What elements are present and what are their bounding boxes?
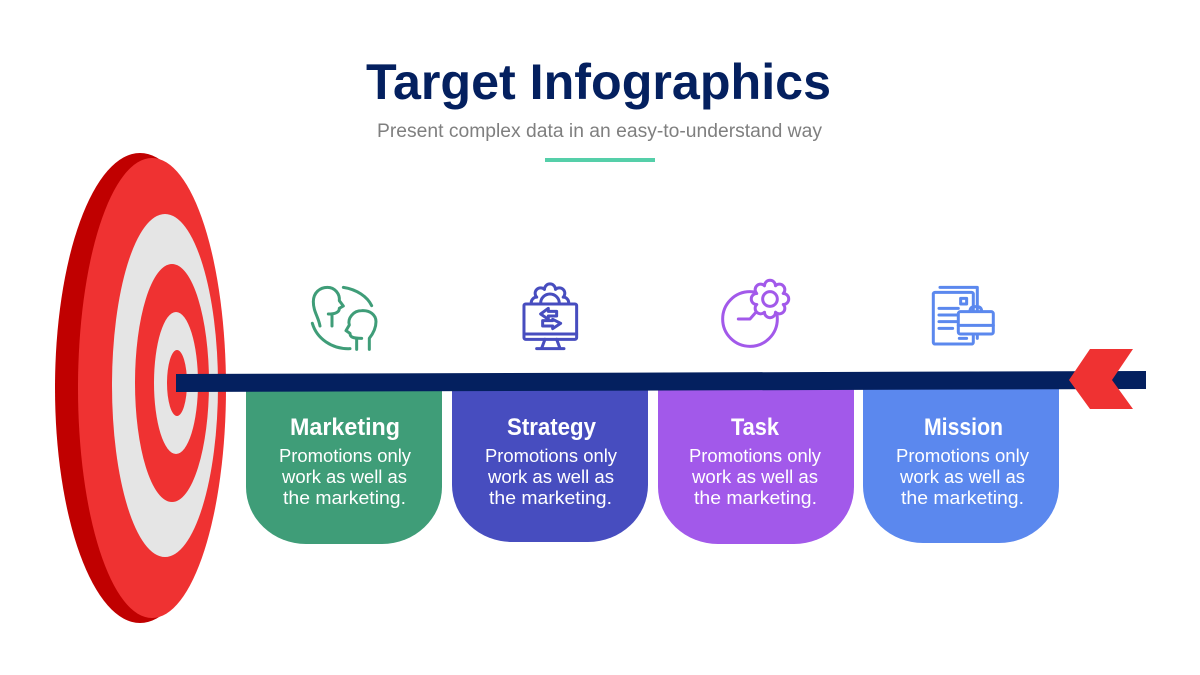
- card: Task: work as well as: [691, 467, 818, 487]
- card: Strategy: Strategy: [507, 414, 597, 441]
- card: Task: Task: [731, 414, 780, 441]
- card: Mission: [863, 385, 1059, 543]
- card: Marketing: Marketing: [290, 414, 400, 441]
- card: Mission: work as well as: [899, 467, 1025, 487]
- icon: document and briefcase: [933, 287, 993, 344]
- card: Strategy: Promotions only: [485, 446, 617, 466]
- card: Task: the marketing.: [694, 488, 817, 508]
- card: Task: Promotions only: [689, 446, 821, 466]
- subtitle: Present complex data in an easy-to-understand way: [377, 121, 822, 142]
- card: Strategy: the marketing.: [489, 488, 612, 508]
- card: Marketing: work as well as: [281, 467, 407, 487]
- icon: two heads: [312, 287, 376, 349]
- card: Marketing: [246, 385, 442, 544]
- arrow: [176, 349, 1146, 409]
- title: Target Infographics: [366, 54, 831, 110]
- card: Mission: Mission: [924, 414, 1003, 441]
- card: Strategy: [452, 385, 648, 542]
- accent underline: [545, 158, 655, 162]
- card: Mission: the marketing.: [901, 488, 1024, 508]
- card: Strategy: work as well as: [487, 467, 614, 487]
- card: Marketing: the marketing.: [283, 488, 406, 508]
- card: Mission: Promotions only: [896, 446, 1029, 466]
- card: Task: [658, 385, 854, 544]
- target board: [55, 153, 226, 623]
- card: Marketing: Promotions only: [279, 446, 411, 466]
- icon: monitor with gear: [524, 284, 577, 349]
- icon: clock with gear: [723, 280, 789, 346]
